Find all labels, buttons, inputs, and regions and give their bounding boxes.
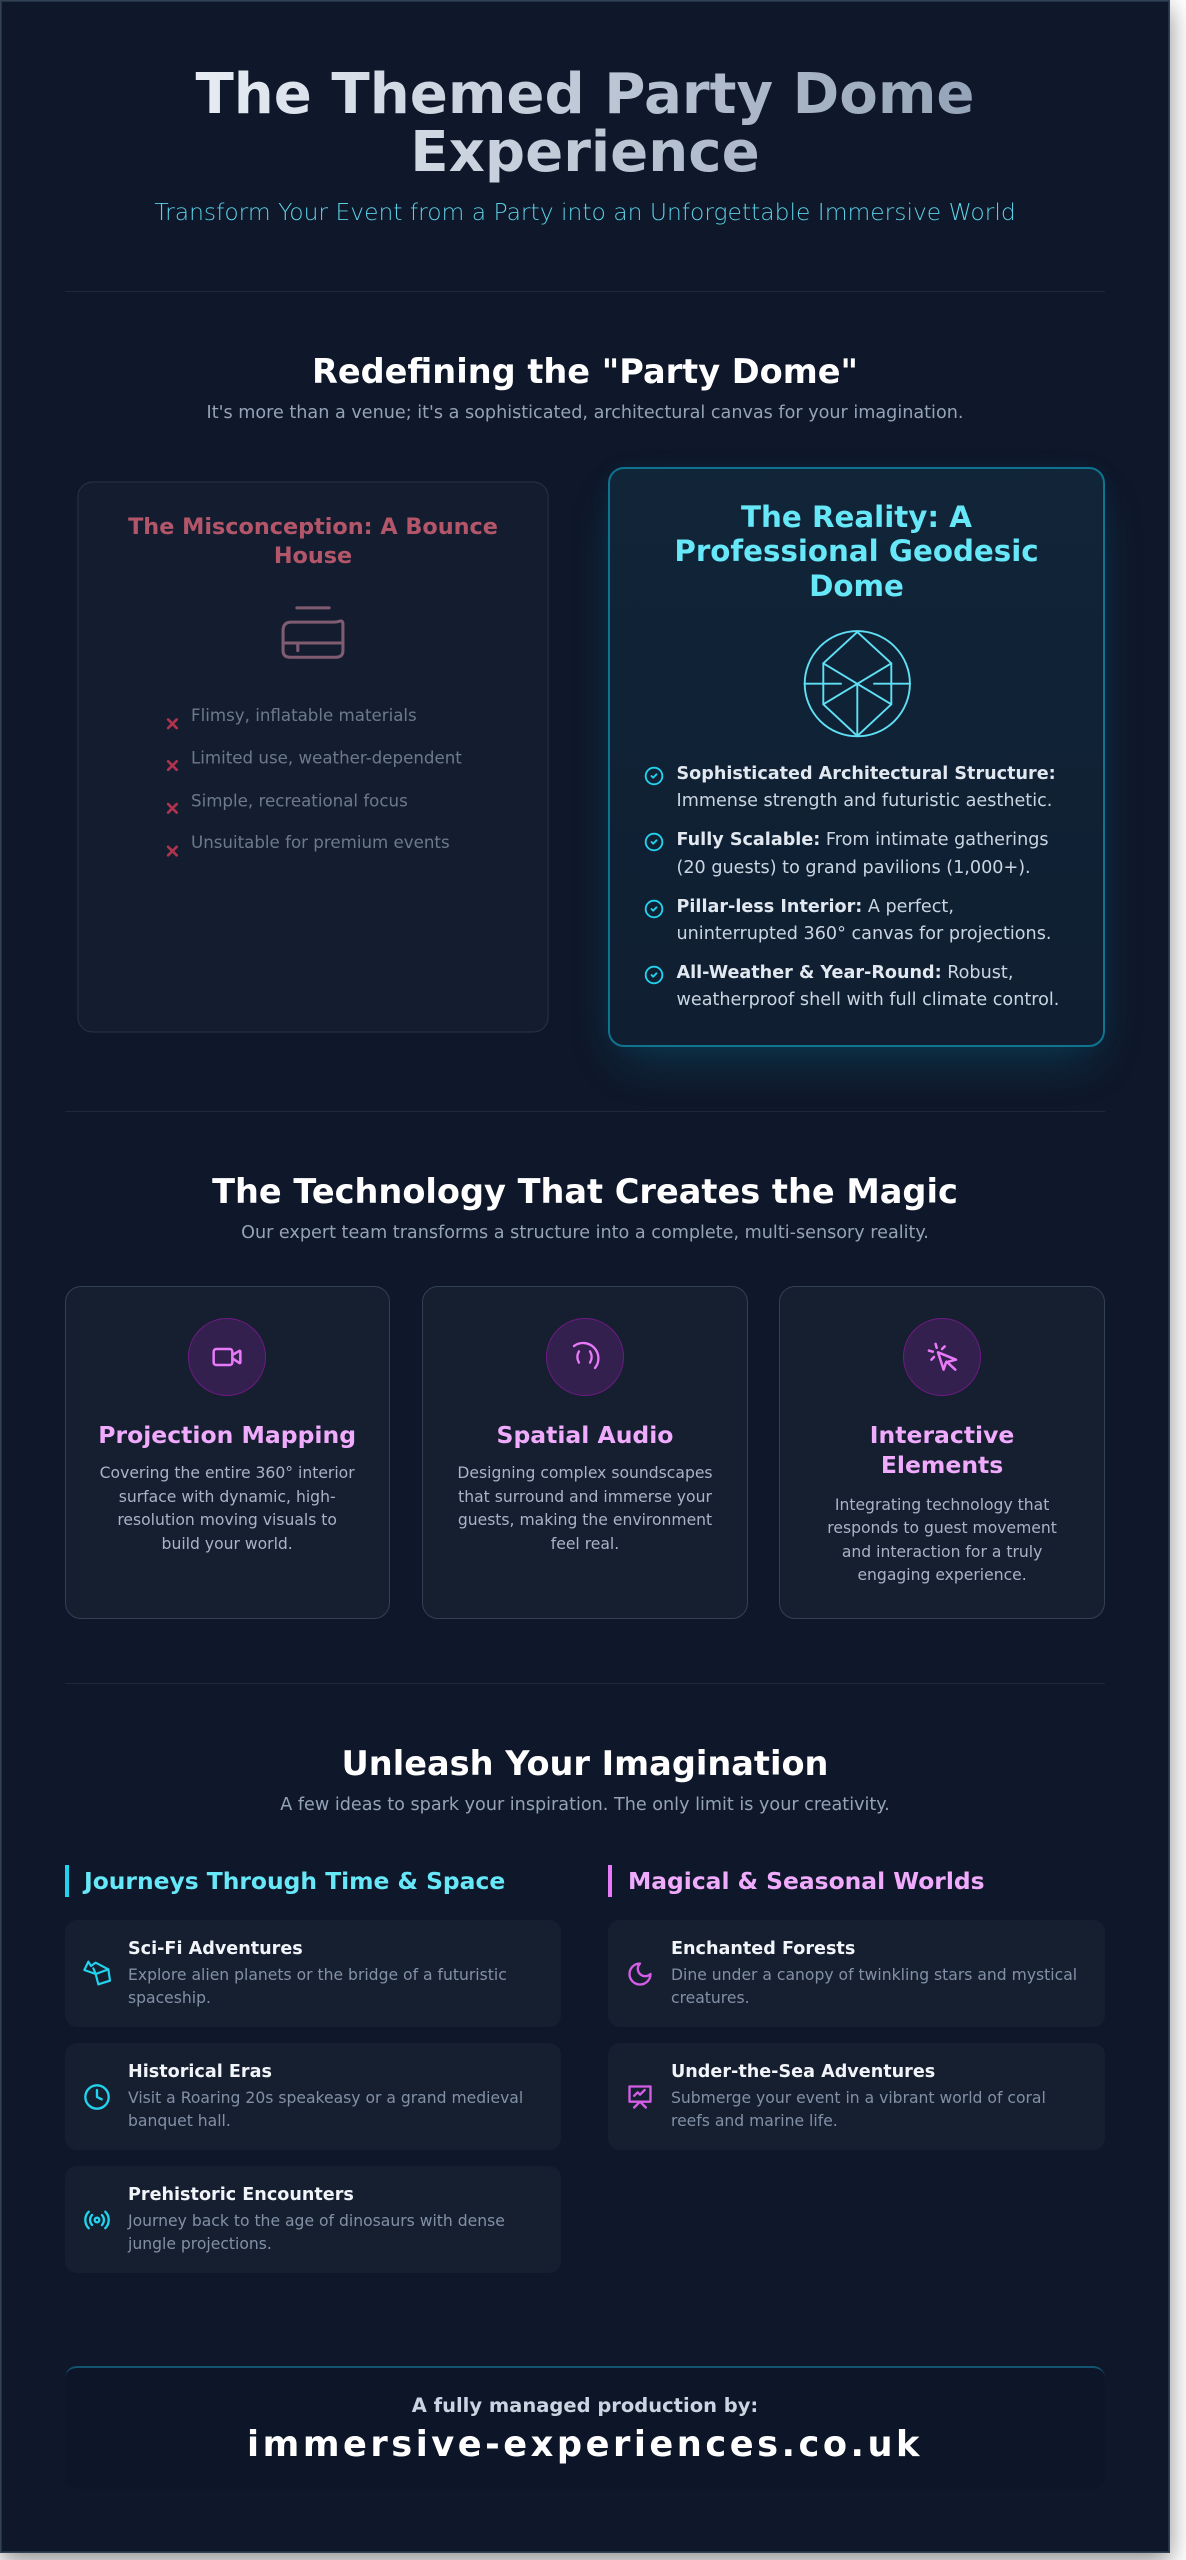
feature text: All-Weather & Year-Round: Robust, (676, 963, 1013, 983)
card description: guests, making the environment (458, 1511, 712, 1529)
feature: all-weather (644, 963, 1059, 1010)
cross 3 (166, 802, 178, 814)
feature text (676, 897, 1051, 944)
panel: misconception (77, 482, 549, 1032)
column heading: journeys: Journeys Through Time & Space (84, 1867, 505, 1895)
icon: moon (628, 1962, 652, 1986)
card description: Integrating technology that (835, 1496, 1049, 1514)
item description: Visit a Roaring 20s speakeasy or a grand medieval (128, 2089, 523, 2107)
list item: unsuitable: Unsuitable for premium events (191, 834, 450, 853)
icon: pointer click (903, 1318, 981, 1396)
subheading: technology: Our expert team transforms a structure into a complete, multi-sensory reality. (241, 1223, 929, 1243)
icon: sound arcs (546, 1318, 624, 1396)
reality heading: The Reality: A (741, 500, 972, 534)
feature text: uninterrupted 360° canvas for projections. (676, 924, 1051, 944)
card: projection mapping (64, 1286, 390, 1619)
item description: Dine under a canopy of twinkling stars and mystical (671, 1966, 1077, 1984)
icon: bounce house (282, 606, 344, 659)
card description: that surround and immerse your (458, 1488, 712, 1506)
card description: build your world. (162, 1535, 293, 1553)
title: The Themed Party Dome (195, 62, 975, 127)
card title: Projection Mapping (98, 1421, 356, 1449)
card description (100, 1464, 355, 1553)
heading: redefining: Redefining the "Party Dome" (312, 352, 858, 391)
check icon (644, 832, 664, 852)
card description: and interaction for a truly (842, 1543, 1042, 1561)
card: interactive elements (779, 1286, 1105, 1619)
card: spatial audio (422, 1286, 748, 1619)
card description: resolution moving visuals to (117, 1511, 337, 1529)
feature: pillar-less (644, 897, 1051, 944)
item description: creatures. (671, 1989, 750, 2007)
item description (671, 1966, 1077, 2007)
item: historical (65, 2043, 561, 2150)
feature text: Pillar-less Interior: A perfect, (676, 897, 954, 917)
reality heading: Professional Geodesic (674, 534, 1039, 568)
item description: Submerge your event in a vibrant world of coral (671, 2089, 1046, 2107)
feature: architectural (644, 764, 1056, 811)
icon: video camera (188, 1318, 266, 1396)
reality heading (674, 500, 1039, 603)
card description (827, 1496, 1057, 1584)
heading: technology: The Technology That Creates the Magic (212, 1172, 958, 1211)
card description: responds to guest movement (827, 1519, 1057, 1537)
subheading: imagination: A few ideas to spark your inspiration. The only limit is your creativity. (280, 1795, 890, 1815)
item: prehistoric (65, 2166, 561, 2273)
footer url: immersive-experiences.co.uk (247, 2424, 923, 2464)
title (65, 66, 1105, 196)
card description: feel real. (551, 1535, 619, 1553)
cross 2 (166, 760, 178, 772)
card description (457, 1464, 713, 1553)
feature text (676, 830, 1049, 878)
item description: Journey back to the age of dinosaurs with dense (128, 2212, 505, 2230)
item title: Enchanted Forests (671, 1939, 855, 1959)
cross 1 (166, 718, 178, 730)
item description: banquet hall. (128, 2112, 231, 2130)
column heading: magical: Magical & Seasonal Worlds (628, 1867, 985, 1895)
feature text: Fully Scalable: From intimate gatherings (676, 830, 1049, 850)
card description: Designing complex soundscapes (457, 1464, 713, 1482)
misconception heading (128, 512, 498, 569)
list item: limited: Limited use, weather-dependent (191, 749, 462, 768)
item: enchanted forests (608, 1920, 1105, 2027)
item description (127, 2212, 505, 2253)
card title: Spatial Audio (497, 1421, 673, 1449)
card description: Covering the entire 360° interior (100, 1464, 355, 1482)
item title: Under-the-Sea Adventures (671, 2062, 935, 2082)
card title: Interactive (870, 1421, 1014, 1449)
feature text: Sophisticated Architectural Structure: (676, 764, 1056, 784)
reality heading: Dome (809, 569, 904, 603)
check icon (644, 766, 664, 786)
item description: reefs and marine life. (671, 2112, 838, 2130)
footer label: A fully managed production by: (412, 2394, 758, 2417)
feature text: (20 guests) to grand pavilions (1,000+). (676, 858, 1031, 878)
item description: jungle projections. (128, 2235, 272, 2253)
card title (870, 1421, 1014, 1479)
list item: simple: Simple, recreational focus (191, 792, 408, 811)
icon: presentation chart (628, 2085, 652, 2109)
check icon (644, 900, 664, 918)
icon: geodesic dome (804, 630, 911, 738)
card description: engaging experience. (857, 1566, 1027, 1584)
item description: spaceship. (128, 1989, 211, 2007)
heading: imagination: Unleash Your Imagination (342, 1744, 828, 1783)
item description (671, 2089, 1046, 2130)
icon: clock (84, 2084, 110, 2110)
item description (128, 2089, 523, 2130)
subtitle: Transform Your Event from a Party into an Unforgettable Immersive World (154, 198, 1016, 226)
misconception heading: House (274, 542, 352, 569)
check icon (644, 966, 664, 984)
item description: Explore alien planets or the bridge of a futuristic (128, 1966, 507, 1984)
feature text: Immense strength and futuristic aesthetic. (676, 791, 1052, 811)
feature text: weatherproof shell with full climate control. (676, 990, 1059, 1010)
footer panel (65, 2366, 1105, 2489)
title: Experience (410, 120, 760, 185)
feature: scalable (644, 830, 1049, 878)
panel: reality (608, 467, 1105, 1047)
icon: rocket box (83, 1960, 112, 1986)
item description (128, 1966, 507, 2007)
feature text (676, 963, 1059, 1010)
item: under the sea (608, 2043, 1105, 2150)
item: sci-fi (65, 1920, 561, 2027)
subheading: redefining: It's more than a venue; it's a sophisticated, architectural canvas for your imagination. (207, 403, 963, 423)
item title: Historical Eras (128, 2062, 272, 2082)
misconception heading: The Misconception: A Bounce (128, 512, 498, 539)
card title: Elements (881, 1451, 1003, 1479)
cross 4 (166, 846, 178, 857)
card description: surface with dynamic, high- (119, 1488, 336, 1506)
feature text (676, 764, 1056, 811)
item title: Prehistoric Encounters (128, 2185, 354, 2205)
icon: radio waves (84, 2210, 110, 2230)
list item: flimsy: Flimsy, inflatable materials (191, 707, 417, 726)
item title: Sci-Fi Adventures (128, 1939, 303, 1959)
